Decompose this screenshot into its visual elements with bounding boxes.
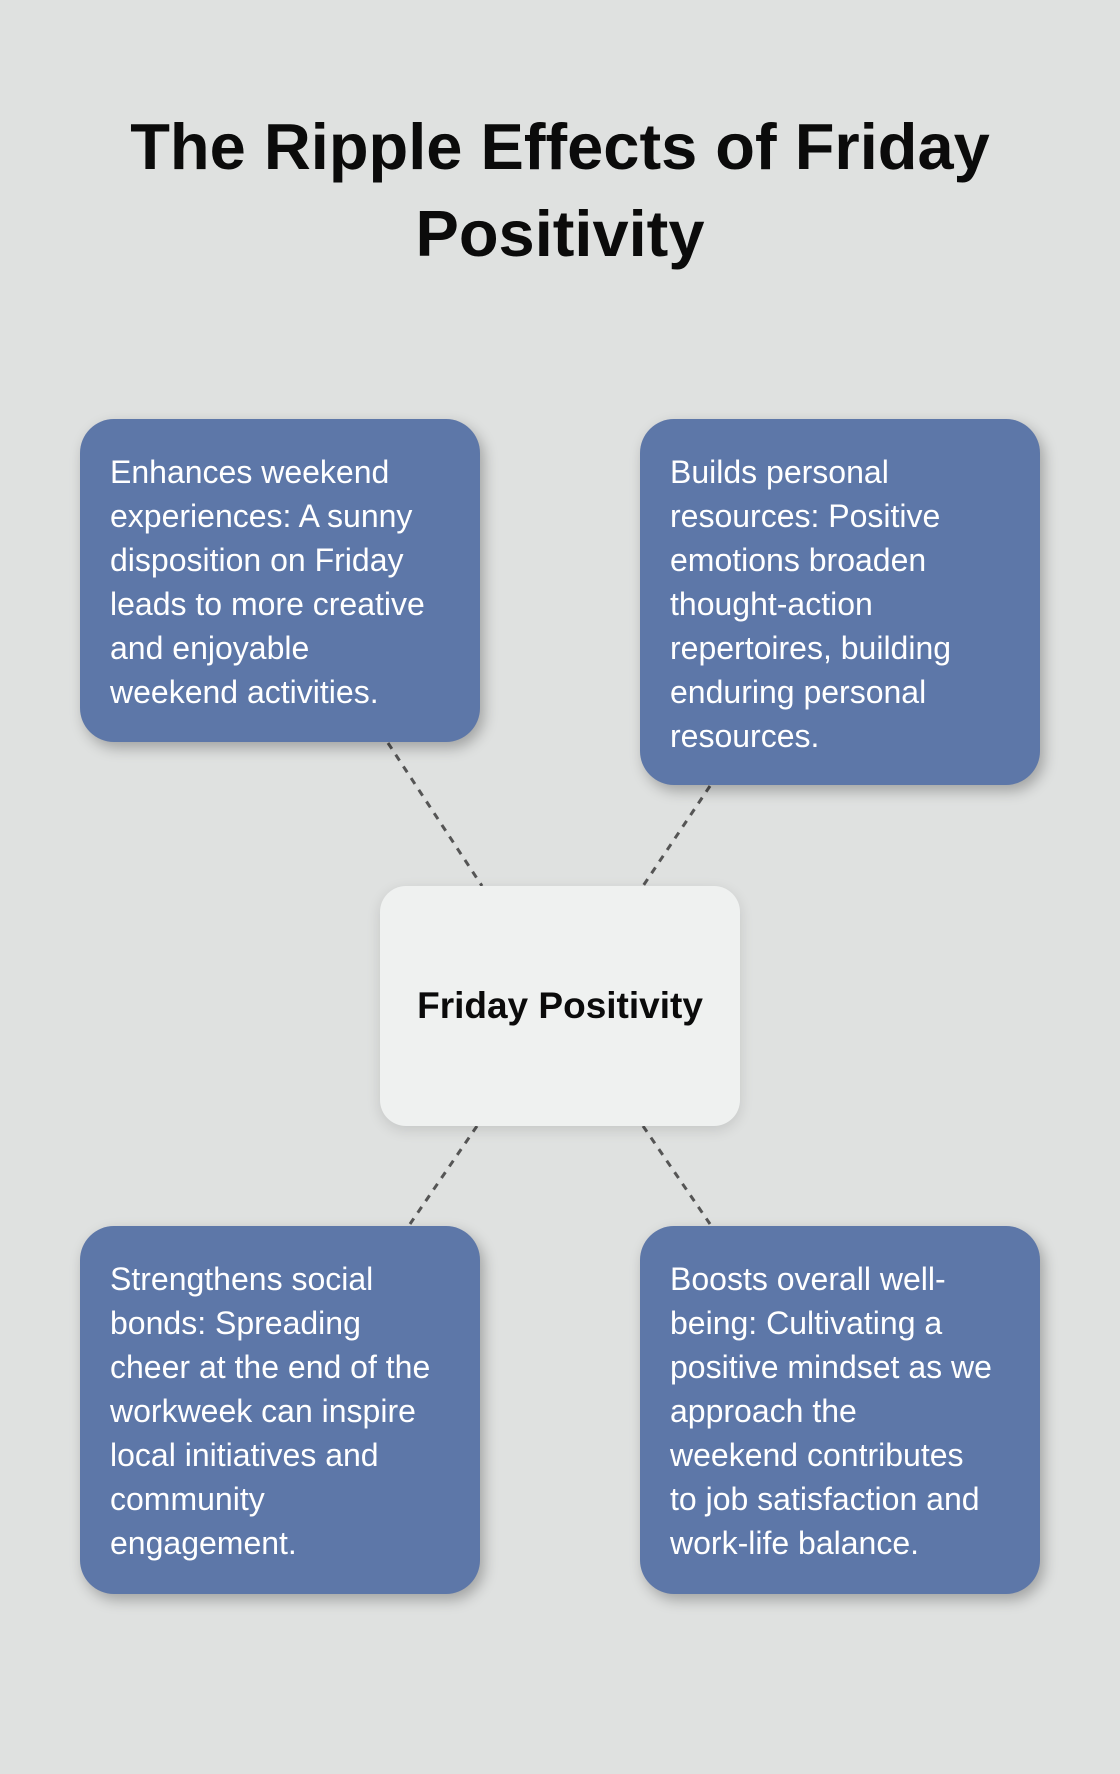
panel: enhances weekend experiences: and enjoyable	[110, 630, 309, 666]
panel: builds personal resources: thought-action	[670, 586, 873, 622]
panel: boosts overall well-being: Boosts overall well-	[670, 1261, 946, 1297]
panel: strengthens social bonds: cheer at the end of the	[110, 1349, 430, 1385]
panel: boosts overall well-being: to job satisfaction and	[670, 1481, 980, 1517]
panel: enhances weekend experiences: disposition on Friday	[110, 542, 403, 578]
panel: boosts overall well-being: weekend contributes	[670, 1437, 964, 1473]
panel: strengthens social bonds: workweek can inspire	[110, 1393, 416, 1429]
panel: boosts overall well-being: positive mindset as we	[670, 1349, 992, 1385]
panel: builds personal resources: Builds personal	[670, 454, 889, 490]
panel: builds personal resources: repertoires, building	[670, 630, 951, 666]
panel: enhances weekend experiences: Enhances weekend	[110, 454, 389, 490]
panel: strengthens social bonds	[80, 1226, 480, 1594]
panel: boosts overall well-being: being: Cultivating a	[670, 1305, 942, 1341]
title: The Ripple Effects of Friday	[130, 110, 990, 183]
center node	[380, 886, 740, 1126]
panel: boosts overall well-being	[640, 1226, 1040, 1594]
panel: boosts overall well-being: work-life balance.	[670, 1525, 919, 1561]
panel: boosts overall well-being: approach the	[670, 1393, 857, 1429]
panel: strengthens social bonds: engagement.	[110, 1525, 297, 1561]
panel: builds personal resources: emotions broaden	[670, 542, 926, 578]
panel: enhances weekend experiences: leads to more creative	[110, 586, 425, 622]
panel: builds personal resources: enduring personal	[670, 674, 926, 710]
center node: Friday Positivity	[417, 985, 703, 1026]
panel: strengthens social bonds: local initiatives and	[110, 1437, 379, 1473]
panel: builds personal resources: resources: Positive	[670, 498, 940, 534]
panel: enhances weekend experiences: experiences: A sunny	[110, 498, 412, 534]
panel: strengthens social bonds: Strengthens social	[110, 1261, 373, 1297]
panel: builds personal resources: resources.	[670, 718, 819, 754]
panel: enhances weekend experiences	[80, 419, 480, 742]
panel: enhances weekend experiences: weekend activities.	[110, 674, 379, 710]
title	[130, 110, 990, 270]
panel: builds personal resources	[640, 419, 1040, 785]
title: Positivity	[416, 197, 704, 270]
panel: strengthens social bonds: community	[110, 1481, 265, 1517]
panel: strengthens social bonds: bonds: Spreading	[110, 1305, 361, 1341]
